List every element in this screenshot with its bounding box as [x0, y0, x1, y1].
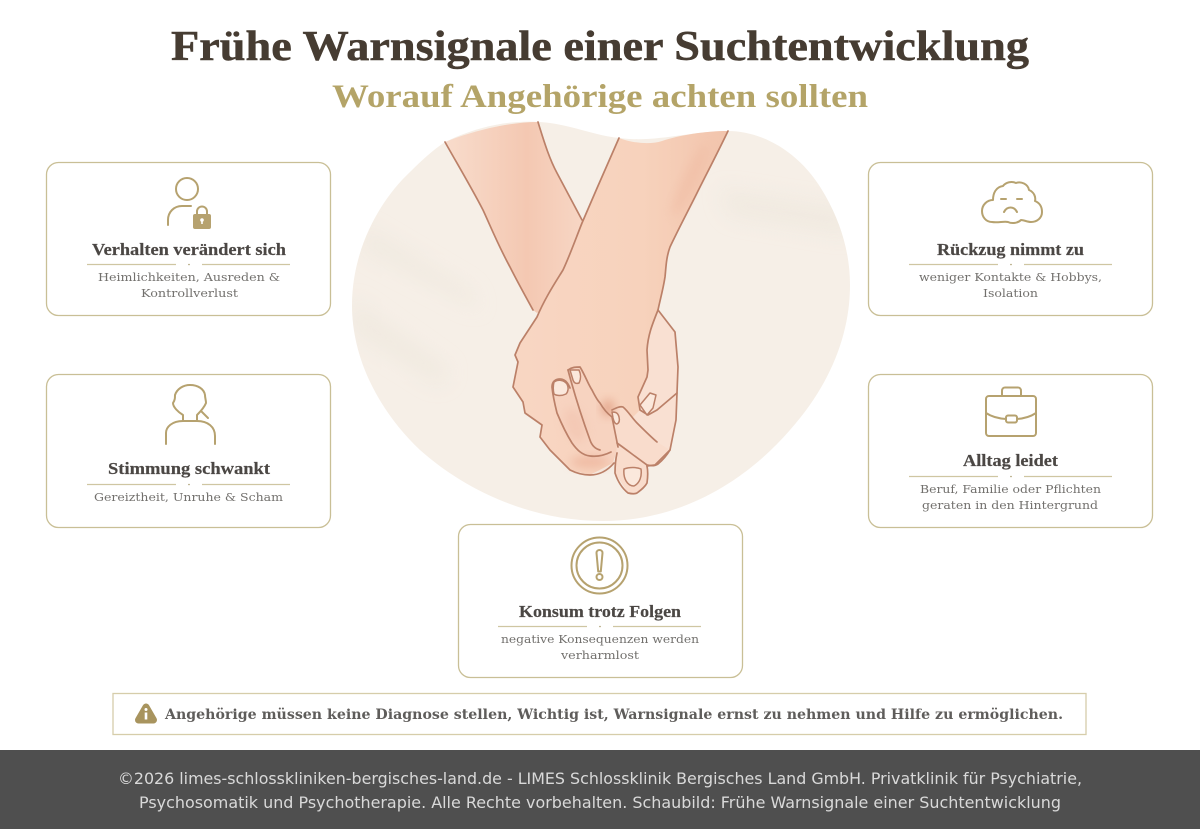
card description: Gereiztheit, Unruhe & Scham — [94, 490, 283, 504]
fingers fill — [552, 367, 618, 463]
card description — [919, 270, 1102, 300]
icon: person with padlock — [168, 178, 211, 229]
card description: Heimlichkeiten, Ausreden & — [98, 270, 280, 284]
card description: Kontrollverlust — [141, 286, 238, 300]
card: Rückzug nimmt zu — [868, 162, 1152, 316]
card description: Beruf, Familie oder Pflichten — [920, 482, 1102, 496]
card description — [98, 270, 280, 300]
footer — [0, 750, 1200, 829]
card description: verharmlost — [560, 648, 639, 662]
card heading: Konsum trotz Folgen — [519, 602, 682, 621]
icon: exclamation in circle — [572, 538, 628, 594]
footer text: Psychosomatik und Psychotherapie. Alle Rechte vorbehalten. Schaubild: Frühe Warnsignale einer Suchtentwicklung — [139, 793, 1061, 812]
card description: negative Konsequenzen werden — [501, 632, 700, 646]
icon: sad cloud — [982, 182, 1042, 223]
card description — [920, 482, 1102, 512]
card: Konsum trotz Folgen — [458, 524, 742, 678]
title: Frühe Warnsignale einer Suchtentwicklung — [171, 24, 1029, 70]
card description: weniger Kontakte & Hobbys, — [919, 270, 1102, 284]
card: Alltag leidet — [868, 374, 1152, 528]
card: Verhalten verändert sich — [46, 162, 330, 316]
back arm — [445, 122, 582, 313]
icon: briefcase — [986, 388, 1036, 436]
footer text — [118, 769, 1082, 812]
icon: warning triangle — [138, 707, 154, 720]
background blob — [352, 122, 850, 521]
hand outlines — [513, 131, 728, 494]
card description: geraten in den Hintergrund — [922, 498, 1099, 512]
icon: person silhouette — [166, 385, 215, 444]
front arm and hand — [513, 131, 728, 475]
card heading: Rückzug nimmt zu — [937, 240, 1084, 259]
illustration: holding hands — [352, 122, 850, 521]
callout text: Angehörige müssen keine Diagnose stellen, Wichtig ist, Warnsignale ernst zu nehmen und Hilfe zu ermöglichen. — [164, 707, 1063, 723]
card description — [501, 632, 700, 662]
card heading: Verhalten verändert sich — [92, 240, 287, 259]
card heading: Alltag leidet — [963, 451, 1058, 470]
footer text: ©2026 limes-schlosskliniken-bergisches-land.de - LIMES Schlossklinik Bergisches Land GmbH. Privatklinik für Psychiatrie, — [118, 769, 1082, 788]
callout: note — [113, 694, 1086, 734]
card: Stimmung schwankt — [46, 374, 330, 528]
card description: Isolation — [983, 286, 1039, 300]
other hand behind — [625, 310, 678, 466]
subtitle: Worauf Angehörige achten sollten — [332, 79, 868, 115]
card heading: Stimmung schwankt — [108, 459, 270, 478]
